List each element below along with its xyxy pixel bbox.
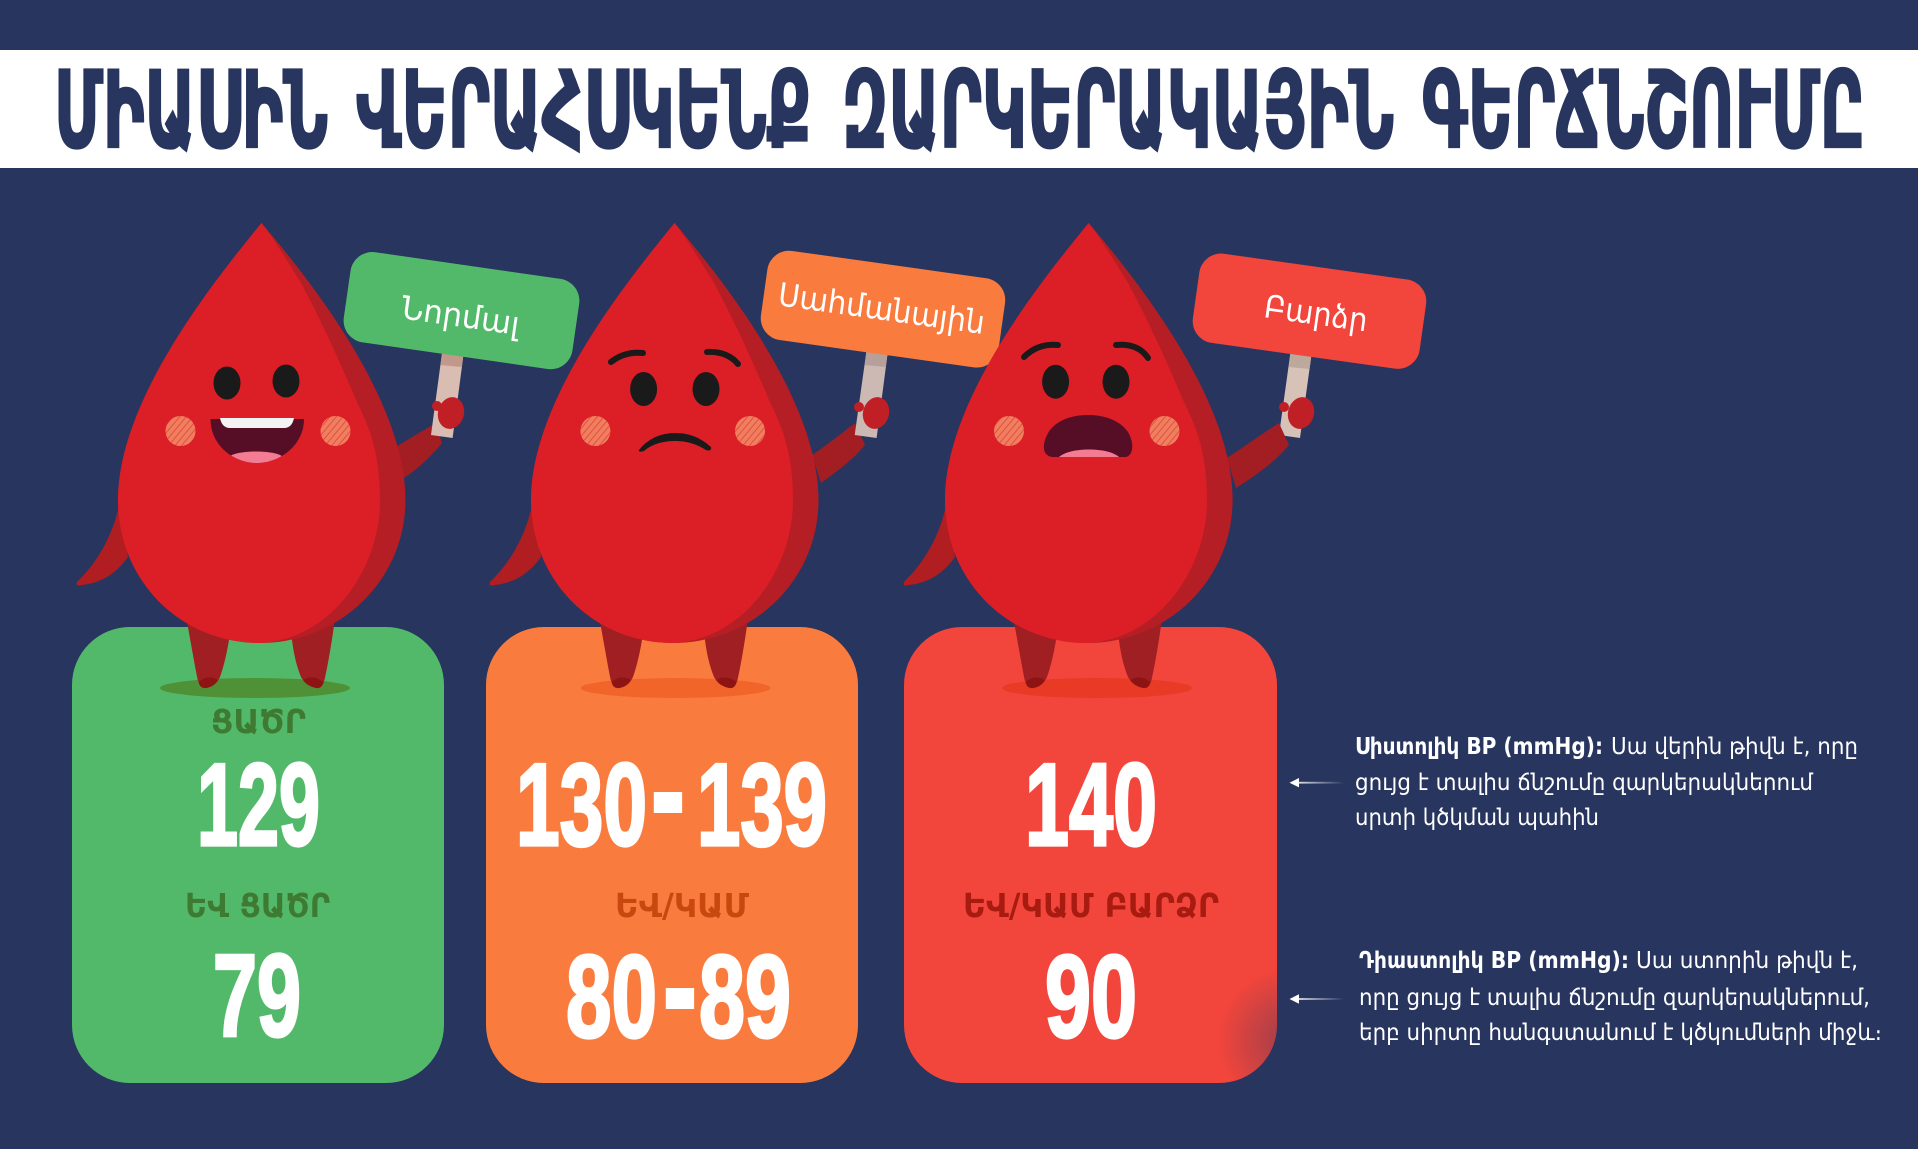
panel: elevated card: -	[653, 727, 683, 858]
panel: normal card: 129	[197, 739, 320, 870]
panel: elevated card: -	[665, 923, 695, 1054]
panel: high card	[904, 627, 1280, 1085]
panel: elevated card: 130	[516, 739, 647, 870]
character: shocked drop	[904, 223, 1289, 688]
panel: elevated card	[486, 627, 858, 1083]
title banner: ՎԵՐԱՀՍԿԵՆՔ	[356, 49, 811, 172]
sign: high	[1190, 251, 1429, 438]
text: diastolic description: երբ սիրտը հանգստանում է կծկումների միջև։	[1359, 1020, 1882, 1046]
panel: normal card: 79	[213, 930, 301, 1061]
panel: high card: 90	[1045, 931, 1137, 1062]
panel: elevated card: ԵՎ/ԿԱՄ	[615, 886, 749, 925]
text: diastolic description: Սա ստորին թիվն է,	[1636, 948, 1858, 974]
text: diastolic description	[1359, 948, 1882, 1046]
panel: normal card: ԵՎ ՑԱԾՐ	[185, 886, 330, 925]
panel: elevated card: 139	[697, 739, 827, 870]
sign: high: Բարձր	[1262, 287, 1370, 339]
text: systolic description: Սա վերին թիվն է, որը	[1611, 734, 1858, 760]
panel: normal card: ՑԱԾՐ	[211, 702, 306, 741]
title banner: ԶԱՐԿԵՐԱԿԱՅԻՆ	[842, 49, 1394, 172]
character: worried drop	[490, 223, 865, 688]
panel: high card: 140	[1025, 739, 1157, 870]
sign: elevated: Սահմանային	[776, 275, 987, 342]
panel: elevated card: 80	[566, 931, 657, 1062]
character: happy drop	[77, 223, 442, 688]
text: systolic description: սրտի կծկման պահին	[1355, 805, 1599, 831]
panel: normal card	[72, 627, 444, 1083]
text: systolic description: ցույց է տալիս ճնշումը զարկերակներում	[1355, 770, 1813, 796]
arrow: diastolic	[1290, 994, 1344, 1004]
sign: elevated	[758, 248, 1008, 438]
arrow: systolic	[1290, 778, 1344, 787]
sign: normal: Նորմալ	[399, 288, 523, 343]
text: systolic description	[1355, 734, 1858, 831]
text: diastolic description: Դիաստոլիկ BP (mmHg):	[1359, 948, 1629, 974]
panel: high card: ԵՎ/ԿԱՄ ԲԱՐՁՐ	[963, 886, 1219, 925]
text: diastolic description: որը ցույց է տալիս ճնշումը զարկերակներում,	[1359, 985, 1870, 1011]
text: systolic description: Սիստոլիկ BP (mmHg):	[1355, 734, 1603, 760]
title banner: ՄԻԱՍԻՆ	[54, 49, 328, 172]
panel: elevated card: 89	[699, 931, 791, 1062]
title banner	[0, 49, 1918, 172]
sign: normal	[341, 249, 582, 438]
